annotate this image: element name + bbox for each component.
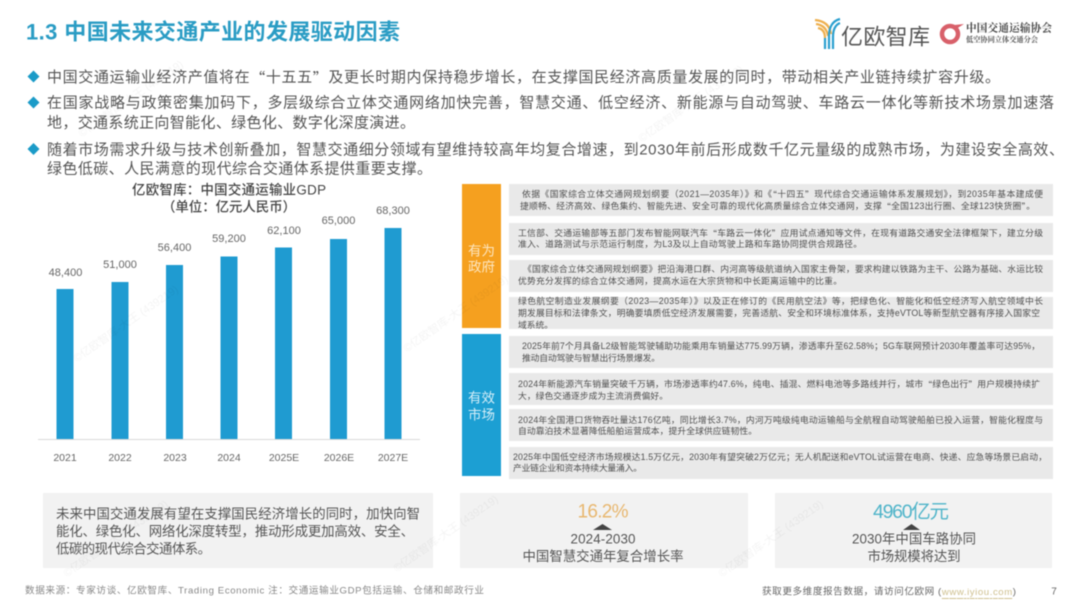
watermarks: ©亿欧智库-大王 (439219) [715,497,826,580]
gov row 4: 域系统。 [518,319,553,330]
panel: effective market [462,334,1053,479]
stat card: smart transport cagr: 2024-2030 [570,532,636,546]
market row 4: 2025年中国低空经济市场规模达1.5万亿元，2030年有望突破2万亿元；无人机配送和eVTOL试运营在电商、快递、应急等场景已启动， [513,451,1047,462]
chart title [132,182,326,214]
gov row 2: 工信部、交通运输部等五部门发布智能网联汽车“车路云一体化”应用试点通知等文件，在现有道路交通安全法律框架下，建立分级 [518,226,1043,240]
gov row 1 [509,184,1053,216]
year axis labels: 2027E [378,452,408,464]
value labels [49,205,410,279]
market row 3 [509,409,1053,441]
stat card: vehicle-road market size: 市场规模将达到 [868,548,960,564]
logo: china communications and transportation association [942,22,1052,44]
icon: bullet diamond 1 [28,70,40,82]
logo: yiou think tank [815,19,930,50]
chart title: （单位：亿元人民币） [162,198,296,214]
blue label [462,334,501,476]
market row 1 [509,336,1053,368]
watermarks: ©亿欧智库-大王 (439219) [400,272,511,355]
summary callout: 未来中国交通发展有望在支撑国民经济增长的同时，加快向智 [56,506,420,522]
page number: 7 [1051,586,1057,598]
bullet line 3 continued: 绿色低碳、人民满意的现代综合交通体系提供重要支撑。 [47,160,432,178]
market row 2: 大，绿色交通逐步成为主流消费偏好。 [518,390,668,401]
gov row 3 [509,260,1053,292]
logo: china communications and transportation association: 中国交通运输协会 [966,22,1052,34]
summary callout: 能化、绿色化、网络化深度转型，推动形成更加高效、安全、 [56,523,414,539]
bullet text block [28,67,1064,178]
market row 3: 2024年全国港口货物吞吐量达176亿吨，同比增长3.7%，内河万吨级纯电动运输船与全航程自动驾驶船舶已投入运营，智能化程度与 [518,414,1043,425]
orange label: 有为 [468,244,495,258]
year axis labels: 2024 [217,452,241,464]
market row 2: 2024年新能源汽车销量突破千万辆，市场渗透率约47.6%，纯电、插混、燃料电池等多路线并行，城市“绿色出行”用户规模持续扩 [518,378,1040,390]
stat card: smart transport cagr: 中国智慧交通年复合增长率 [522,548,684,564]
orange label: 政府 [468,260,495,274]
year axis labels: 2026E [324,452,354,464]
orange label [462,184,501,328]
gov row 1: 依据《国家综合立体交通网规划纲要（2021—2035年）》和《“十四五”现代综合交通运输体系发展规划》，到2035年基本建成便 [522,188,1043,200]
watermarks: ©亿欧智库-大王 (439219) [390,492,501,575]
value labels: 59,200 [212,233,246,245]
bullet line 2: 在国家战略与政策密集加码下，多层级综合立体交通网络加快完善，智慧交通、低空经济、新能源与自动驾驶、车路云一体化等新技术场景加速落 [47,94,1054,112]
stat card: smart transport cagr: 16.2% [578,502,629,522]
bullet line 3: 随着市场需求升级与技术创新叠加，智慧交通细分领域有望维持较高年均复合增速，到2030年前后形成数千亿元量级的成熟市场，为建设安全高效、 [47,140,1064,158]
icon: bullet diamond 2 [28,96,40,108]
market row 1: 2025年前7个月具备L2级智能驾驶辅助功能乘用车销量达775.99万辆，渗透率升至62.58%；5G车联网预计2030年覆盖率可达95%， [522,340,1040,351]
value labels: 68,300 [376,205,410,217]
source note: 数据来源：专家访谈、亿欧智库、Trading Economic 注：交通运输业GDP包括运输、仓储和邮政行业 [25,584,484,596]
year axis labels: 2025E [269,452,299,464]
watermarks [60,57,826,580]
watermarks: ©亿欧智库-大王 (439219) [635,62,746,145]
value labels: 51,000 [103,259,137,271]
stat card: vehicle-road market size: 4960亿元 [873,501,949,523]
gov row 1: 捷顺畅、经济高效、绿色集约、智能先进、安全可靠的现代化高质量综合立体交通网，支撑“全国123出行圈、全球123快货圈”。 [520,200,1035,212]
stat card: vehicle-road market size: 2030年中国车路协同 [852,530,976,546]
chart title: 亿欧智库：中国交通运输业GDP [132,182,326,198]
footer link text: 获取更多维度报告数据，请访问亿欧网 (www.iyiou.com) [762,586,1016,598]
title: 1.3 中国未来交通产业的发展驱动因素 [26,20,400,44]
market row 3: 自动靠泊技术显著降低船舶运营成本，提升全球供应链韧性。 [518,425,757,436]
icon: bullet diamond 3 [28,143,40,155]
year axis labels [53,452,408,464]
gov row 3: 《国家综合立体交通网规划纲要》把沿海港口群、内河高等级航道纳入国家主骨架，要求构建以铁路为主干、公路为基础、水运比较 [523,263,1043,274]
panel: active government [462,184,1053,330]
gov row 3: 优势充分发挥的综合立体交通网，提高水运在大宗货物和中长距离运输中的比重。 [518,275,842,286]
blue label: 有效 [468,390,495,406]
value labels: 48,400 [49,267,82,279]
watermarks: ©亿欧智库-大王 (439219) [60,497,171,580]
year axis labels: 2021 [53,452,77,464]
market row 1: 推动自动驾驶与智慧出行场景爆发。 [522,352,660,363]
gov row 2: 准入、道路测试与示范运行制度，为L3及以上自动驾驶上路和车路协同提供合规路径。 [518,238,862,249]
watermarks: ©亿欧智库-大王 (439219) [75,57,186,140]
gov row 4 [509,295,1053,330]
gov row 4: 期发展目标和法律条文，明确要填质低空经济发展需要，完善适航、安全和环境标准体系，支持eVTOL等新型航空器有序接入国家空 [518,307,1040,318]
bullet line 2 continued: 地，交通系统正向智能化、绿色化、数字化深度演进。 [47,114,415,132]
market row 4: 产业链企业和资本持续大量涌入。 [513,462,642,473]
summary callout: 低碳的现代综合交通体系。 [56,540,211,556]
value labels: 62,100 [267,225,301,237]
year axis labels: 2023 [163,452,187,464]
logo: yiou think tank: 亿欧智库 [841,24,930,50]
summary callout [43,493,433,568]
gov row 4: 绿色航空制造业发展纲要（2023—2035年）》以及正在修订的《民用航空法》等，把绿色化、智能化和低空经济写入航空领域中长 [518,295,1043,306]
bars [56,228,402,439]
market row 4 [509,447,1053,479]
year axis labels: 2022 [108,452,132,464]
logo: china communications and transportation association: 低空协同立体交通分会 [966,35,1039,44]
watermarks: ©亿欧智库-大王 (439219) [70,282,181,365]
value labels: 65,000 [322,215,355,227]
stat card: smart transport cagr [460,493,748,568]
bullet line 1: 中国交通运输业经济产值将在“十五五”及更长时期内保持稳步增长，在支撑国民经济高质量发展的同时，带动相关产业链持续扩容升级。 [47,67,1000,88]
value labels: 56,400 [158,242,191,254]
stat card: vehicle-road market size [775,493,1052,568]
gov row 2 [509,223,1053,255]
blue label: 市场 [468,406,495,422]
bar chart: transport GDP [38,182,420,464]
market row 2 [509,373,1053,405]
